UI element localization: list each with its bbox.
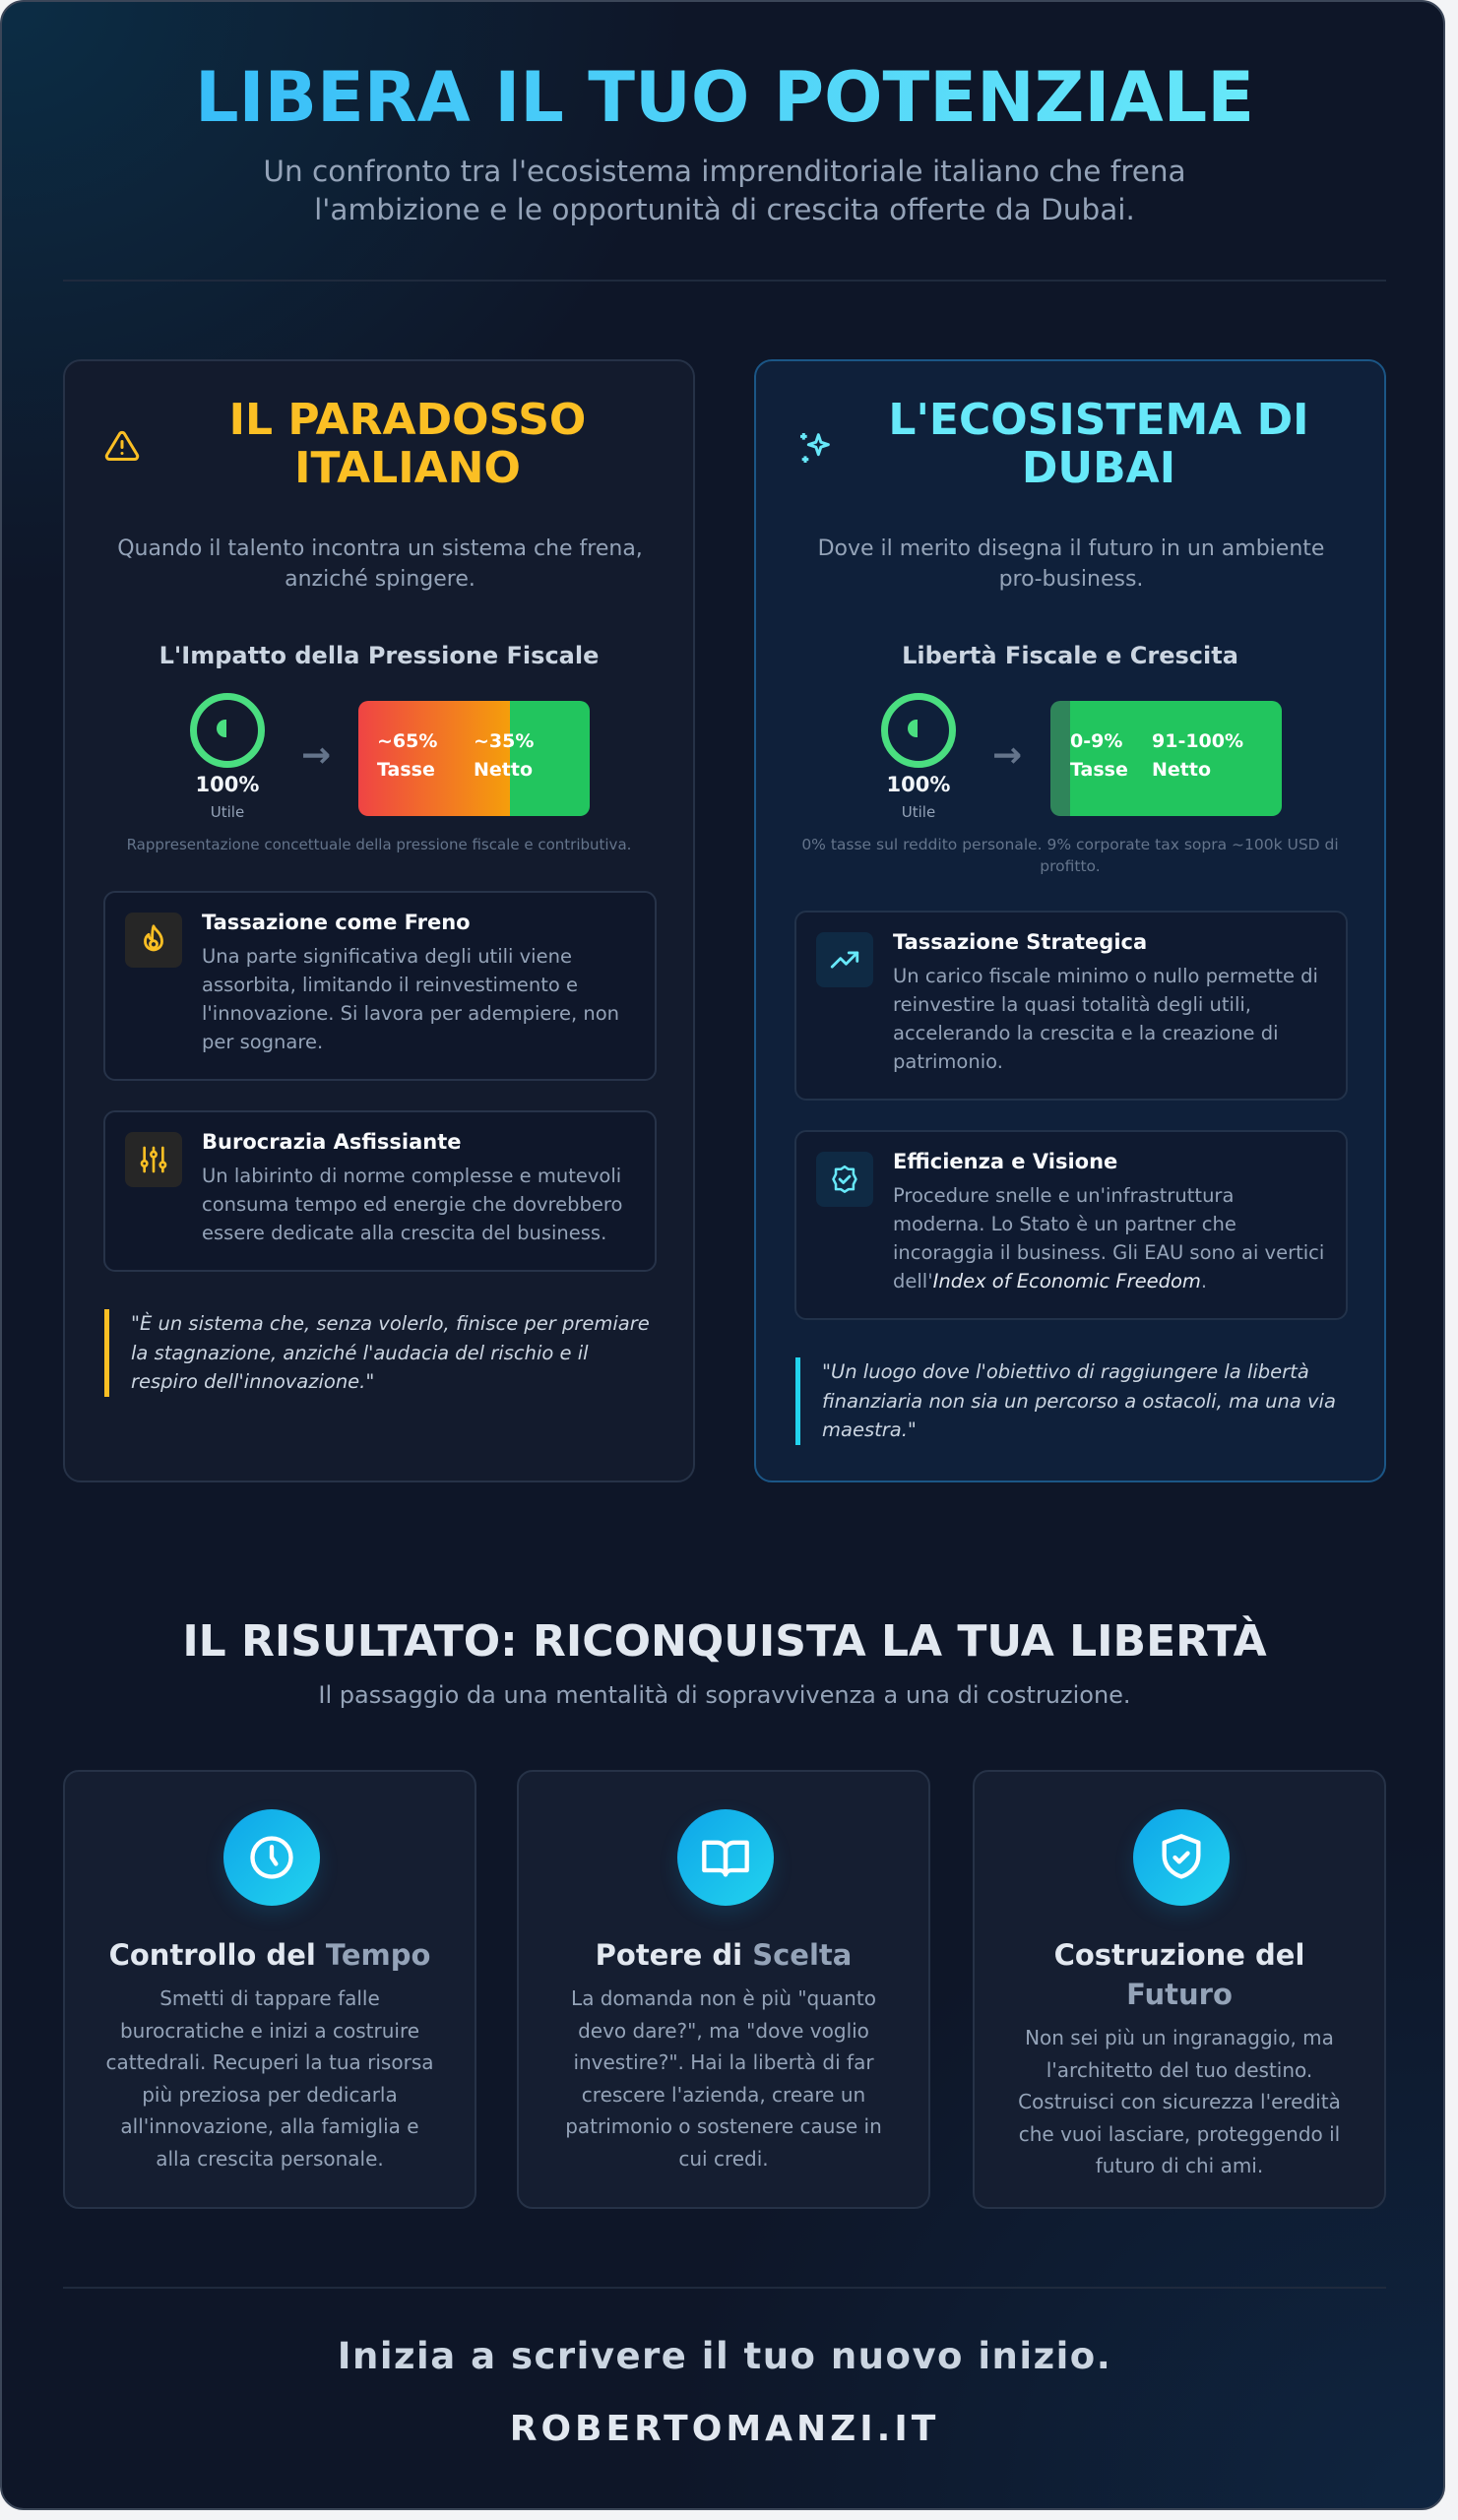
card: efficienza e visione <box>794 1130 1348 1320</box>
card: potere di scelta: La domanda non è più "quanto devo dare?", ma "dove voglio investire?". Hai la libertà di far crescere l'azienda, creare un patrimonio o sostenere cause in cui credi. <box>565 1986 882 2171</box>
card: costruzione del futuro <box>973 1770 1386 2209</box>
chart: italy tax: ~35% <box>474 730 534 752</box>
subheading: Libertà Fiscale e Crescita <box>902 642 1238 669</box>
chart: dubai tax: 100% <box>887 773 950 796</box>
chart: italy tax: 100% <box>196 773 259 796</box>
footer: call to action: Inizia a scrivere il tuo nuovo inizio. <box>338 2335 1111 2377</box>
subheading: L'Impatto della Pressione Fiscale <box>159 642 599 669</box>
card: tassazione come freno <box>103 891 657 1081</box>
chart: dubai tax <box>881 693 1282 821</box>
quote: italy: "È un sistema che, senza volerlo, finisce per premiare <box>131 1312 650 1335</box>
card: efficienza e visione: incoraggia il business. Gli EAU sono ai vertici <box>893 1241 1324 1264</box>
quote: italy: respiro dell'innovazione." <box>131 1370 374 1393</box>
card: controllo del tempo: Smetti di tappare falle burocratiche e inizi a costruire cattedrali. Recuperi la tua risorsa più preziosa per dedicarla all'innovazione, alla famiglia e alla crescita personale. <box>106 1986 433 2171</box>
heading: dubai: L'ECOSISTEMA DI <box>888 395 1309 445</box>
quote: dubai: maestra." <box>822 1418 917 1441</box>
description: Quando il talento incontra un sistema che frena, anziché spingere. <box>117 536 643 592</box>
card: efficienza e visione: Efficienza e Visione <box>893 1150 1117 1173</box>
card: tassazione come freno: Una parte significativa degli utili viene assorbita, limitando il reinvestimento e l'innovazione. Si lavora per adempiere, non per sognare. <box>202 945 619 1053</box>
caption: 0% tasse sul reddito personale. 9% corporate tax sopra ~100k USD di profitto. <box>801 836 1339 875</box>
card: potere di scelta <box>517 1770 930 2209</box>
subtitle: Un confronto tra l'ecosistema imprenditoriale italiano che frena <box>263 155 1186 188</box>
chart: italy tax: ~65% <box>377 730 437 752</box>
card: tassazione strategica: Un carico fiscale minimo o nullo permette di reinvestire la quasi totalità degli utili, accelerando la crescita e la creazione di patrimonio. <box>893 965 1318 1073</box>
quote: dubai <box>795 1357 1366 1445</box>
panel: dubai <box>754 359 1386 1482</box>
card: tassazione strategica: Tassazione Strategica <box>893 930 1147 954</box>
description: Dove il merito disegna il futuro in un ambiente pro‑business. <box>818 536 1324 592</box>
chart: italy tax: Utile <box>211 803 244 821</box>
card: costruzione del futuro: Non sei più un ingranaggio, ma l'architetto del tuo destino. Costruisci con sicurezza l'eredità che vuoi lasciare, proteggendo il futuro di chi ami. <box>1018 2026 1341 2177</box>
chart: italy tax: Tasse <box>377 759 435 781</box>
chart: italy tax <box>190 693 590 821</box>
heading: italy <box>229 395 586 493</box>
card: burocrazia <box>103 1110 657 1272</box>
icon: shield check <box>1133 1809 1230 1906</box>
heading: italy: ITALIANO <box>294 443 521 493</box>
card: tassazione come freno: Tassazione come Freno <box>202 911 471 934</box>
quote: italy: la stagnazione, anziché l'audacia del rischio e il <box>131 1341 589 1364</box>
caption: Rappresentazione concettuale della pressione fiscale e contributiva. <box>127 836 631 853</box>
icon: sparkles <box>800 433 830 463</box>
icon: flame <box>125 913 182 968</box>
quote: italy <box>104 1309 675 1396</box>
chart: dubai tax: 0-9% <box>1070 730 1122 752</box>
card: burocrazia: Un labirinto di norme complesse e mutevoli consuma tempo ed energie che dovrebbero essere dedicate alla crescita del business. <box>202 1165 622 1244</box>
card: efficienza e visione: dell'Index of Economic Freedom. <box>893 1270 1207 1292</box>
subtitle <box>263 155 1186 226</box>
icon: sliders <box>125 1132 182 1187</box>
card: efficienza e visione: moderna. Lo Stato è un partner che <box>893 1213 1236 1235</box>
subtitle: l'ambizione e le opportunità di crescita offerte da Dubai. <box>314 193 1135 226</box>
icon: book <box>677 1809 774 1906</box>
chart: italy tax: → <box>301 735 331 776</box>
card: efficienza e visione: Procedure snelle e un'infrastruttura <box>893 1184 1234 1207</box>
subtitle: result: Il passaggio da una mentalità di sopravvivenza a una di costruzione. <box>318 1681 1131 1709</box>
chart: dubai tax: Utile <box>902 803 935 821</box>
icon: badge check <box>816 1152 873 1207</box>
heading: italy: IL PARADOSSO <box>229 395 586 445</box>
chart: dubai tax: Netto <box>1152 759 1211 781</box>
heading: dubai: DUBAI <box>1022 443 1175 493</box>
card: controllo del tempo <box>63 1770 476 2209</box>
footer: website: ROBERTOMANZI.IT <box>510 2409 939 2449</box>
icon: warning <box>104 431 140 461</box>
quote: dubai: finanziaria non sia un percorso a ostacoli, ma una via <box>822 1390 1336 1412</box>
heading: dubai <box>888 395 1309 493</box>
panel: italy <box>63 359 695 1482</box>
card: tassazione strategica <box>794 911 1348 1101</box>
heading: result: IL RISULTATO: RICONQUISTA LA TUA LIBERTÀ <box>182 1616 1267 1667</box>
quote: dubai: "Un luogo dove l'obiettivo di raggiungere la libertà <box>822 1360 1309 1383</box>
chart: italy tax: Netto <box>474 759 533 781</box>
chart: dubai tax: Tasse <box>1070 759 1128 781</box>
chart: dubai tax: 91-100% <box>1152 730 1243 752</box>
card: controllo del tempo: Controllo del Tempo <box>109 1938 430 1972</box>
title: LIBERA IL TUO POTENZIALE <box>195 57 1254 138</box>
card: potere di scelta: Potere di Scelta <box>596 1938 852 1972</box>
icon: trending up <box>816 932 873 987</box>
card: burocrazia: Burocrazia Asfissiante <box>202 1130 462 1154</box>
card: costruzione del futuro: Costruzione del Futuro <box>1054 1938 1304 2011</box>
chart: dubai tax: → <box>992 735 1022 776</box>
icon: clock <box>223 1809 320 1906</box>
